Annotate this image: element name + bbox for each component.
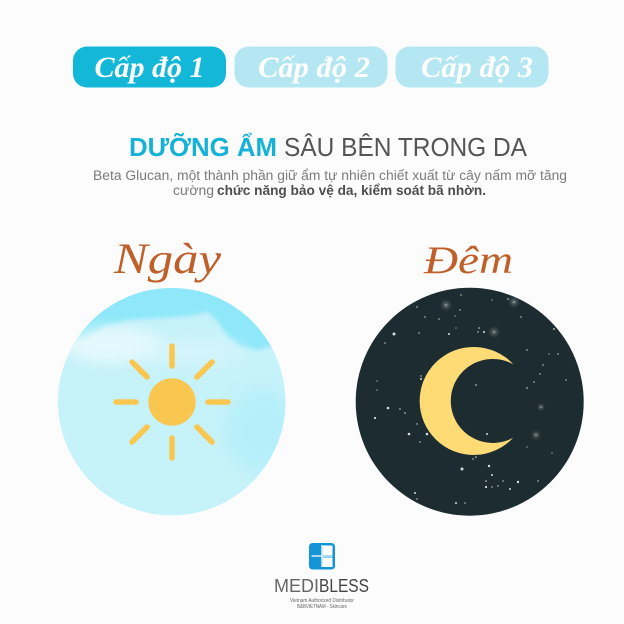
icon: crescent moon: [420, 347, 513, 455]
tab: level 3: Cấp độ 3: [421, 51, 533, 84]
logo: Medibless: [274, 543, 369, 610]
tab: level 2: Cấp độ 2: [258, 51, 370, 84]
description text: Beta Glucan, một thành phần giữ ẩm tự nhiên chiết xuất từ cây nấm mỡ tăng: [93, 168, 567, 183]
logo icon: [309, 543, 335, 570]
tab: level 1 active: Cấp độ 1: [94, 51, 204, 84]
logo tagline: Vietnam Authorized Distributor: [290, 598, 354, 604]
description text: cường: [173, 183, 214, 198]
description text: [93, 168, 567, 198]
heading: [129, 132, 528, 162]
tab: level 3: [396, 46, 548, 88]
level tabs: [73, 46, 548, 88]
panel: night circle: [356, 288, 584, 516]
label: night: Đêm: [423, 239, 513, 282]
heading: DƯỠNG ẨM: [129, 132, 277, 162]
tab: level 2: [234, 46, 388, 88]
stars: [374, 294, 567, 504]
label: day: Ngày: [113, 236, 222, 283]
sky with clouds: [58, 288, 286, 516]
logo wordmark: BLESS: [319, 576, 369, 596]
logo tagline: [290, 598, 354, 610]
icon: sun: [116, 346, 228, 458]
logo wordmark: [274, 576, 369, 596]
description text: chức năng bảo vệ da, kiểm soát bã nhờn.: [217, 183, 486, 198]
logo tagline: B&BVIETNAM - Skincare: [297, 604, 347, 610]
tab: level 1 active: [73, 46, 226, 88]
logo wordmark: MEDI: [274, 576, 319, 596]
heading: SÂU BÊN TRONG DA: [284, 132, 528, 162]
panel: day circle: [58, 288, 286, 516]
